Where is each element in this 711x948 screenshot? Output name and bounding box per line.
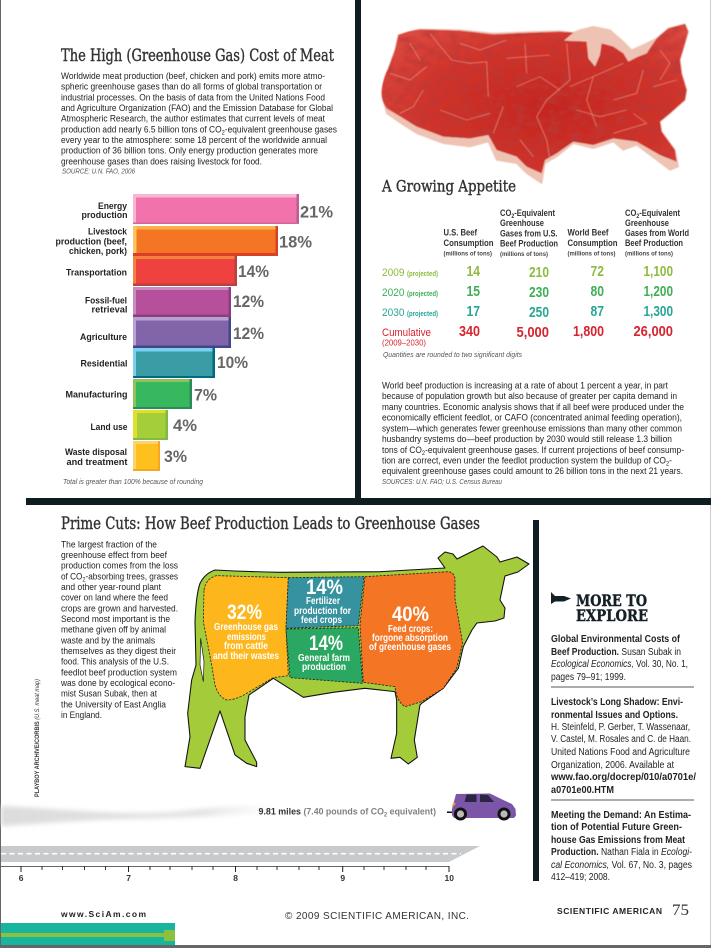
exhaust trail — [1, 805, 272, 826]
row: cumulative — [382, 323, 673, 348]
footer url: www.SciAm.com — [60, 909, 146, 919]
row: 2030: 17 — [466, 303, 480, 320]
bar: agriculture 12%: 12% — [233, 324, 264, 343]
distance label — [258, 806, 436, 818]
bar: residential 10%: 10% — [217, 353, 248, 372]
row: 2009: 2009 — [382, 267, 404, 279]
text block: prime cuts explanation: The largest fraction of the — [61, 539, 157, 550]
magazine name: SCIENTIFIC AMERICAN — [557, 906, 662, 916]
reference: global environmental costs: pages 79–91; 1999. — [551, 672, 626, 683]
column header: CO2 from world beef: 2 — [636, 213, 640, 220]
text block: meat intro: Atmospheric Research, the author estimates that current levels of meat — [61, 114, 325, 125]
row: 2030: 2030 — [382, 307, 404, 319]
row: 2020: 80 — [590, 283, 604, 300]
text block: meat intro: -equivalent greenhouse gases — [225, 124, 337, 135]
column header: U.S. beef consumption: Consumption — [444, 237, 494, 248]
column header: CO2 from U.S. beef — [500, 207, 558, 258]
text block: prime cuts explanation: crops are grown and harvested. — [61, 603, 178, 614]
row: cumulative: (2009–2030) — [382, 338, 426, 348]
column header: CO2 from world beef: CO — [625, 207, 639, 218]
row: 2030: 87 — [590, 303, 604, 320]
text block: prime cuts explanation: Second most important is the — [61, 614, 170, 625]
heading: more to explore: EXPLORE — [576, 606, 648, 625]
zone: cattle and wastes 32%: Greenhouse gas — [214, 622, 278, 633]
column header: U.S. beef consumption: U.S. Beef — [444, 226, 478, 238]
bar: fossil-fuel retrieval 12% — [85, 287, 264, 317]
text block: meat intro: production add nearly 6.5 billion tons of CO — [61, 124, 245, 135]
reference: livestock's long shadow: United Nations Food and Agriculture — [551, 747, 690, 758]
heading: cost of meat: The High (Greenhouse Gas) Cost of Meat — [61, 46, 334, 66]
heading: more to explore: MORE TO — [576, 591, 647, 610]
bar: waste disposal 3%: 3% — [164, 447, 187, 466]
text block: meat intro — [61, 71, 337, 167]
column header: CO2 from U.S. beef: 2 — [511, 213, 515, 220]
zone: feed crops 40%: forgone absorption — [372, 633, 448, 644]
column header: CO2 from world beef — [625, 207, 689, 258]
bar: residential 10%: Residential — [80, 358, 128, 368]
mileage axis: 8 — [233, 873, 238, 883]
zone: feed crops 40%: Feed crops: — [388, 624, 433, 635]
text block: beef production growth: 2 — [666, 460, 670, 468]
column header: U.S. beef consumption: (millions of tons) — [444, 250, 492, 258]
text block: beef production growth: 2 — [422, 450, 425, 457]
bar: transportation 14% — [66, 256, 269, 286]
mileage axis: 7 — [126, 873, 131, 883]
bar: manufacturing 7%: Manufacturing — [66, 388, 128, 400]
zone: general farm 14% — [286, 628, 363, 683]
column header: CO2 from world beef: (millions of tons) — [625, 250, 673, 258]
reference: livestock's long shadow: Organization, 2006. Available at — [551, 760, 674, 771]
text block: meat intro: and Agriculture Organization (FAO) and the Emission Database for Global — [61, 103, 333, 114]
text block: meat intro: spheric greenhouse gases than do all forms of global transportation or — [61, 82, 323, 93]
bar: fossil-fuel retrieval 12%: retrieval — [92, 304, 128, 314]
column header: CO2 from world beef: Beef Production — [625, 237, 683, 248]
bar: energy production 21%: 21% — [300, 202, 333, 222]
text block: prime cuts explanation: the University of East Anglia — [61, 699, 167, 710]
table: beef consumption and emissions — [382, 207, 689, 348]
reference: livestock's long shadow: a0701e00.HTM — [551, 785, 614, 796]
column header: CO2 from world beef: Gases from World — [625, 227, 689, 238]
panel: more to explore — [550, 591, 696, 883]
source note: SOURCE: U.N. FAO, 2006 — [62, 168, 135, 176]
row: 2030: (projected) — [407, 311, 438, 318]
illustration: meat shaped like the U.S. — [377, 20, 693, 183]
footer tab — [1, 923, 175, 945]
column header: U.S. beef consumption — [444, 226, 494, 258]
icon: purple car — [447, 794, 516, 820]
mileage axis: 9 — [340, 873, 345, 883]
row: 2009 — [382, 263, 673, 281]
reference: meeting the demand: cal Economics, Vol. 67, No. 3, pages — [551, 860, 692, 871]
reference: global environmental costs — [551, 634, 688, 683]
bar: land use 4%: 4% — [173, 416, 197, 435]
text block: prime cuts explanation — [60, 539, 178, 721]
row: 2009: 14 — [466, 263, 481, 280]
icon: arrow — [551, 592, 571, 604]
reference: meeting the demand: Meeting the Demand: An Estima- — [551, 810, 691, 821]
bar: fossil-fuel retrieval 12%: Fossil-fuel — [85, 294, 127, 306]
bar: transportation 14%: 14% — [238, 262, 269, 281]
reference: global environmental costs: Ecological Economics, Vol. 30, No. 1, — [551, 659, 688, 670]
zone: general farm 14%: production — [302, 662, 346, 673]
bar: livestock production 18% — [56, 226, 312, 256]
bar: land use 4%: Land use — [90, 421, 128, 432]
column header: CO2 from world beef: -Equivalent — [639, 207, 680, 218]
reference: livestock's long shadow: www.fao.org/docrep/010/a0701e/ — [550, 772, 696, 783]
bar: livestock production 18%: Livestock — [88, 226, 128, 236]
bar: agriculture 12%: Agriculture — [80, 331, 127, 342]
text block: prime cuts explanation: mist Susan Subak, then at — [61, 689, 157, 700]
distance label: 9.81 miles — [258, 806, 301, 818]
column header: CO2 from U.S. beef: Greenhouse — [500, 217, 544, 228]
reference: livestock's long shadow: Livestock’s Long Shadow: Envi- — [551, 697, 683, 708]
text block: meat intro: Worldwide meat production (beef, chicken and pork) emits more atmo- — [61, 71, 325, 82]
row: 2020 — [382, 283, 673, 301]
row: 2030: 250 — [529, 304, 549, 321]
road — [1, 846, 480, 862]
column header: CO2 from U.S. beef: Beef Production — [500, 238, 558, 248]
zone: feed crops 40%: 40% — [392, 603, 429, 626]
bar: manufacturing 7% — [66, 379, 217, 409]
reference: meeting the demand: tion of Potential Future Green- — [551, 822, 682, 833]
photo credit: PLAYBOY ARCHIVE/CORBIS (U.S. meat map) — [34, 679, 41, 797]
copyright: © 2009 SCIENTIFIC AMERICAN, INC. — [285, 911, 469, 922]
page number: 75 — [672, 902, 689, 919]
row: 2020: 15 — [466, 283, 480, 300]
bar: waste disposal 3%: and treatment — [66, 456, 128, 467]
bar: fossil-fuel retrieval 12%: 12% — [233, 292, 264, 311]
column header: CO2 from U.S. beef: Gases from U.S. — [500, 228, 558, 238]
text block: prime cuts explanation: greenhouse effect from beef — [61, 550, 167, 561]
text block: meat intro: production of 36 billion tons. Only energy production generates more — [61, 146, 318, 157]
bar chart: emissions by sector — [56, 194, 333, 471]
text block: prime cuts explanation: methane given off by animal — [61, 625, 166, 636]
table footnote: Quantities are rounded to two significant digits — [383, 352, 522, 359]
row: 2009: 72 — [590, 263, 604, 280]
zone: fertilizer 14%: 14% — [306, 576, 343, 599]
panel: prime cuts — [1, 514, 529, 883]
row: cumulative: 1,800 — [573, 323, 604, 340]
panel: a growing appetite — [381, 176, 689, 486]
chart footnote: Total is greater than 100% because of rounding — [63, 479, 203, 486]
zone: cattle and wastes 32%: and their wastes — [213, 651, 279, 662]
row: 2009: 210 — [529, 264, 549, 281]
zone: cattle and wastes 32%: 32% — [227, 601, 262, 624]
text block: beef production growth: because of population growth but also because of greater per capita demand in — [382, 391, 677, 402]
row: 2020: 230 — [529, 284, 549, 301]
reference: livestock's long shadow — [550, 697, 696, 796]
zone: fertilizer 14%: feed crops — [301, 615, 342, 626]
heading: more to explore — [576, 591, 648, 625]
bar: energy production 21%: production — [82, 209, 128, 220]
heading: growing appetite: A Growing Appetite — [381, 176, 516, 196]
row: 2009: 1,100 — [644, 263, 673, 280]
column header: CO2 from U.S. beef: CO — [500, 207, 514, 218]
text block: meat intro: industrial processes. On the basis of data from the United Nations Food — [61, 92, 325, 103]
zone: cattle and wastes 32%: emissions — [227, 632, 266, 643]
row: cumulative: 340 — [459, 323, 480, 340]
bar: waste disposal 3%: Waste disposal — [65, 446, 127, 457]
reference: meeting the demand: house Gas Emissions from Meat — [551, 835, 686, 846]
cow silhouette — [185, 546, 529, 768]
text block: meat intro: greenhouse gases than does raising livestock for food. — [61, 156, 262, 167]
bar: energy production 21%: Energy — [98, 200, 128, 211]
text block: prime cuts explanation: was done by ecological econo- — [60, 678, 175, 689]
bar: waste disposal 3% — [65, 441, 187, 471]
text block: prime cuts explanation: cover on land where the feed — [61, 593, 168, 604]
column header: CO2 from U.S. beef: -Equivalent — [514, 207, 555, 218]
column header: world beef consumption: (millions of tons) — [568, 250, 616, 258]
text block: meat intro: 2 — [222, 129, 225, 136]
row: 2009: (projected) — [407, 271, 438, 278]
row: 2030 — [382, 303, 673, 321]
source note: SOURCES: U.N. FAO; U.S. Census Bureau — [382, 479, 502, 486]
bar: livestock production 18%: chicken, pork) — [69, 245, 127, 256]
bar: energy production 21% — [82, 194, 333, 224]
bar: livestock production 18%: production (beef, — [56, 235, 127, 246]
text block: prime cuts explanation: and other year-round plant — [61, 582, 161, 593]
mileage axis: 10 — [444, 873, 454, 883]
row: cumulative: Cumulative — [382, 327, 431, 339]
row: 2020: 1,200 — [644, 283, 673, 300]
reference: meeting the demand: Production. Nathan Fiala in Ecologi- — [551, 847, 693, 858]
bar: manufacturing 7%: 7% — [194, 386, 217, 404]
bar: livestock production 18%: 18% — [279, 232, 312, 252]
row: cumulative: 5,000 — [516, 324, 549, 341]
distance label: 2 — [384, 812, 388, 818]
row: 2030: 1,300 — [644, 303, 673, 320]
mileage axis: 6 — [19, 873, 24, 883]
bar: agriculture 12% — [80, 317, 264, 348]
row: cumulative: 26,000 — [634, 323, 673, 340]
column header: CO2 from world beef: Greenhouse — [625, 217, 669, 228]
text block: prime cuts explanation: production comes from the loss — [61, 561, 178, 572]
zone: general farm 14%: General farm — [298, 653, 350, 664]
text block: beef production growth: husbandry systems do—beef production by 2030 would still release 1.3 billion — [382, 434, 672, 445]
text block: beef production growth: tion are correct, even under the feedlot production system the buildup of CO — [382, 456, 705, 466]
text block: beef production growth: World beef production is increasing at a rate of about 1 percent a year, in part — [382, 380, 668, 392]
text block: prime cuts explanation: -absorbing trees, grasses — [86, 571, 178, 582]
reference: meeting the demand: 412–419; 2008. — [551, 872, 610, 883]
text block: prime cuts explanation: of CO — [61, 571, 86, 582]
text block: meat intro: every year to the atmosphere: some 18 percent of the worldwide annual — [61, 135, 327, 146]
row: 2020: (projected) — [407, 291, 438, 298]
text block: prime cuts explanation: feedlot beef production system — [61, 667, 177, 678]
reference: livestock's long shadow: ronmental Issues and Options. — [551, 710, 678, 721]
column header: CO2 from U.S. beef: (millions of tons) — [500, 251, 548, 258]
text block: prime cuts explanation: 2 — [82, 576, 86, 583]
illustration: cow divided into emission shares — [185, 546, 529, 768]
reference: global environmental costs: Beef Production. Susan Subak in — [551, 647, 681, 658]
column header: world beef consumption: Consumption — [568, 237, 618, 248]
bar: residential 10% — [80, 348, 248, 378]
tail gap — [200, 638, 204, 682]
text block: beef production growth — [382, 380, 684, 477]
text block: prime cuts explanation: themselves as they digest their — [61, 646, 177, 657]
heading: prime cuts: Prime Cuts: How Beef Production Leads to Greenhouse Gases — [61, 514, 480, 534]
mileage axis — [1, 866, 454, 883]
distance label: (7.40 pounds of CO — [304, 806, 391, 818]
reference: global environmental costs: Global Environmental Costs of — [551, 634, 681, 645]
zone: general farm 14%: 14% — [309, 632, 343, 655]
row: 2020: 2020 — [382, 287, 404, 299]
text block: prime cuts explanation: waste and by the animals — [60, 635, 155, 646]
zone: fertilizer 14% — [286, 576, 364, 628]
zone: cattle and wastes 32% — [203, 576, 288, 700]
zone: feed crops 40% — [360, 572, 463, 707]
bar: transportation 14%: Transportation — [66, 266, 127, 278]
bar: land use 4% — [90, 410, 197, 440]
zone: cattle and wastes 32%: from cattle — [224, 641, 268, 652]
zone: fertilizer 14%: Fertilizer — [306, 596, 340, 607]
column header: world beef consumption: World Beef — [568, 226, 609, 238]
panel: the high cost of meat — [56, 46, 337, 486]
text block: prime cuts explanation: food. This analysis of the U.S. — [61, 657, 169, 668]
text block: beef production growth: - — [669, 456, 672, 466]
distance label: equivalent) — [387, 806, 436, 818]
text block: beef production growth: tons of CO — [382, 445, 428, 456]
zone: fertilizer 14%: production for — [294, 606, 351, 617]
text block: prime cuts explanation: in England. — [61, 710, 102, 721]
reference: meeting the demand — [551, 810, 693, 883]
column header: world beef consumption — [568, 226, 618, 258]
footer — [1, 902, 689, 945]
zone: feed crops 40%: of greenhouse gases — [369, 642, 451, 653]
